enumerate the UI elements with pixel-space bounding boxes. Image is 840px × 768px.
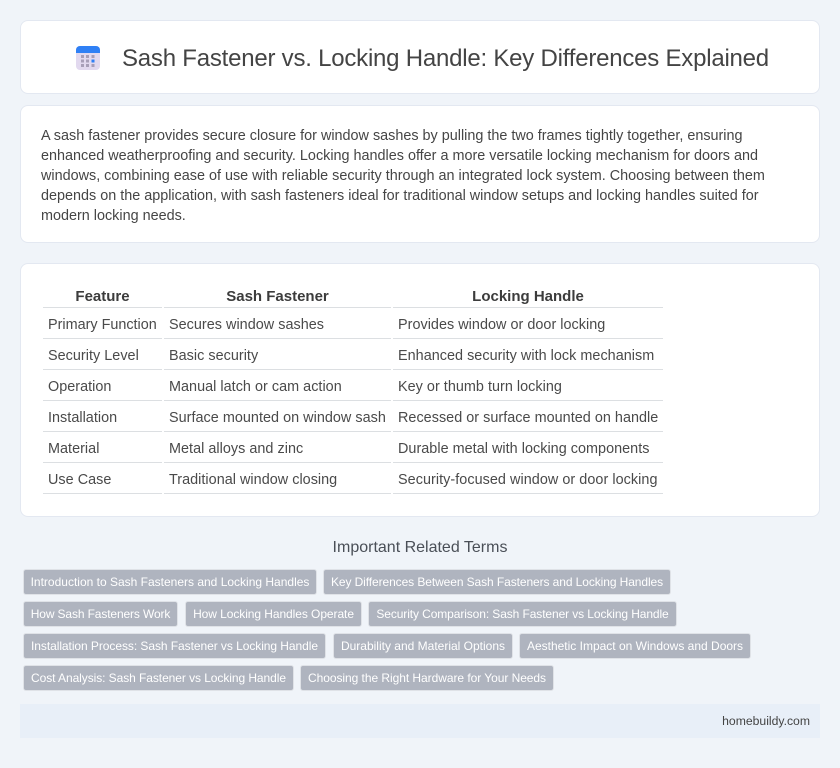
comparison table: Primary Function	[48, 317, 157, 333]
footer credit: homebuildy.com	[722, 714, 810, 728]
intro text: windows, combining ease of use with reliable security through an integrated lock system. Choosing between them	[41, 168, 765, 184]
comparison table: Key or thumb turn locking	[398, 379, 562, 395]
related terms tags: Aesthetic Impact on Windows and Doors	[527, 639, 743, 653]
related terms tags: Durability and Material Options	[341, 639, 505, 653]
intro text: enhanced weatherproofing and security. Locking handles offer a more versatile locking mechanism for doors and	[41, 148, 758, 164]
related terms tags: Installation Process: Sash Fastener vs Locking Handle	[31, 639, 318, 653]
comparison table: Basic security	[169, 348, 258, 364]
related terms tags: Security Comparison: Sash Fastener vs Locking Handle	[376, 607, 669, 621]
comparison table	[43, 288, 663, 494]
related terms tags: How Sash Fasteners Work	[31, 607, 170, 621]
comparison table: Use Case	[48, 472, 111, 488]
intro text: A sash fastener provides secure closure for window sashes by pulling the two frames tightly together, ensuring	[41, 128, 743, 144]
footer bar	[20, 704, 820, 738]
comparison table: Material	[48, 441, 99, 457]
comparison table: Security Level	[48, 348, 139, 364]
related terms tags: Cost Analysis: Sash Fastener vs Locking Handle	[31, 671, 286, 685]
comparison table: Recessed or surface mounted on handle	[398, 410, 658, 426]
heading: related terms: Important Related Terms	[333, 539, 507, 556]
comparison table: Secures window sashes	[169, 317, 324, 333]
comparison table: Sash Fastener	[226, 288, 329, 305]
related terms tags: Key Differences Between Sash Fasteners and Locking Handles	[331, 575, 663, 589]
comparison table: Feature	[75, 288, 130, 305]
comparison table: Installation	[48, 410, 117, 426]
panel: comparison table	[20, 263, 820, 517]
intro text: depends on the application, with sash fasteners ideal for traditional window setups and locking handles suited for	[41, 188, 759, 204]
comparison table: Metal alloys and zinc	[169, 441, 303, 457]
comparison table: Security-focused window or door locking	[398, 472, 658, 488]
comparison table: Durable metal with locking components	[398, 441, 649, 457]
comparison table: Traditional window closing	[169, 472, 337, 488]
header panel	[20, 20, 820, 94]
comparison table: Provides window or door locking	[398, 317, 605, 333]
icon: calendar	[76, 46, 100, 70]
related terms tags: Introduction to Sash Fasteners and Locking Handles	[31, 575, 309, 589]
title: Sash Fastener vs. Locking Handle: Key Differences Explained	[122, 45, 769, 72]
comparison table: Enhanced security with lock mechanism	[398, 348, 654, 364]
panel: introduction	[20, 105, 820, 243]
comparison table: Locking Handle	[472, 288, 584, 305]
intro text: modern locking needs.	[41, 208, 186, 224]
intro text	[41, 128, 765, 224]
related terms tags: How Locking Handles Operate	[193, 607, 354, 621]
comparison table: Operation	[48, 379, 111, 395]
comparison table: Surface mounted on window sash	[169, 410, 386, 426]
related terms tags: Choosing the Right Hardware for Your Needs	[308, 671, 546, 685]
related terms tags	[23, 569, 751, 691]
comparison table: Manual latch or cam action	[169, 379, 342, 395]
